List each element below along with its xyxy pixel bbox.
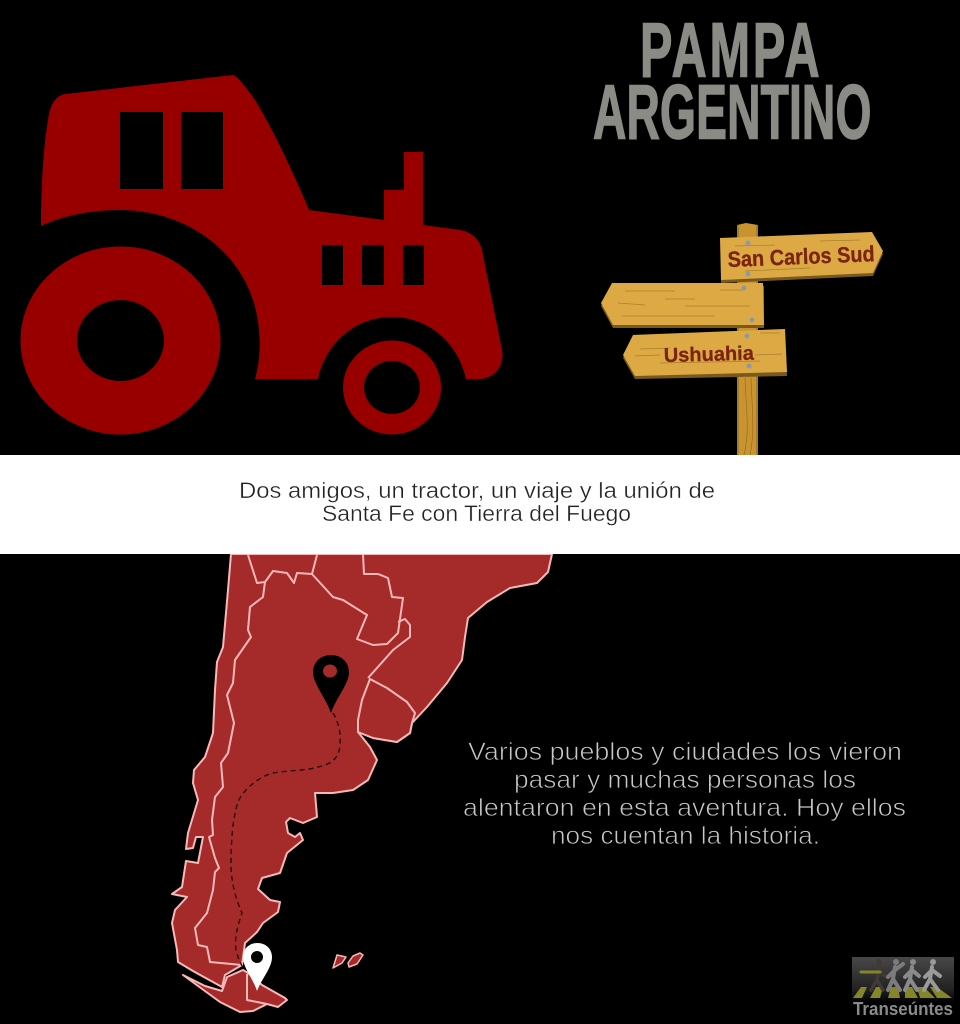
body text [463, 738, 906, 850]
post [737, 223, 758, 455]
sign: Ushuahia: Ushuahia [664, 343, 755, 367]
Tierra del Fuego border [247, 974, 267, 1004]
sign: blank plank [601, 283, 764, 328]
icon: white map pin [243, 943, 272, 991]
body text: nos cuentan la historia. [551, 822, 820, 850]
icon: black map pin [313, 655, 349, 713]
sign: Ushuahia [623, 329, 787, 379]
band text: Dos amigos, un tractor, un viaje y la unión de [239, 478, 715, 503]
sign: San Carlos Sud [720, 232, 883, 283]
white band [0, 455, 960, 554]
signpost [601, 223, 883, 455]
body text: pasar y muchas personas los [514, 766, 856, 794]
logo: Transeúntes: Transeúntes [853, 999, 953, 1019]
route dashed line [231, 713, 340, 966]
Uruguay [358, 679, 415, 742]
sign: San Carlos Sud: San Carlos Sud [727, 241, 875, 272]
Tierra del Fuego [183, 970, 287, 1012]
Falkland islands [333, 953, 363, 968]
title: ARGENTINO [593, 71, 871, 155]
title [593, 7, 871, 155]
title: PAMPA [640, 7, 820, 93]
body text: Varios pueblos y ciudades los vieron [468, 738, 902, 766]
logo: Transeúntes [852, 957, 954, 1019]
landmass [172, 554, 552, 987]
map of southern South America [172, 554, 552, 1012]
icon: red tractor [20, 75, 502, 435]
band text: Santa Fe con Tierra del Fuego [322, 501, 631, 526]
Chile border [195, 582, 265, 965]
Bolivia and Paraguay borders [248, 555, 403, 645]
body text: alentaron en esta aventura. Hoy ellos [463, 794, 906, 822]
band text [239, 478, 715, 526]
Brazil border [368, 619, 410, 678]
